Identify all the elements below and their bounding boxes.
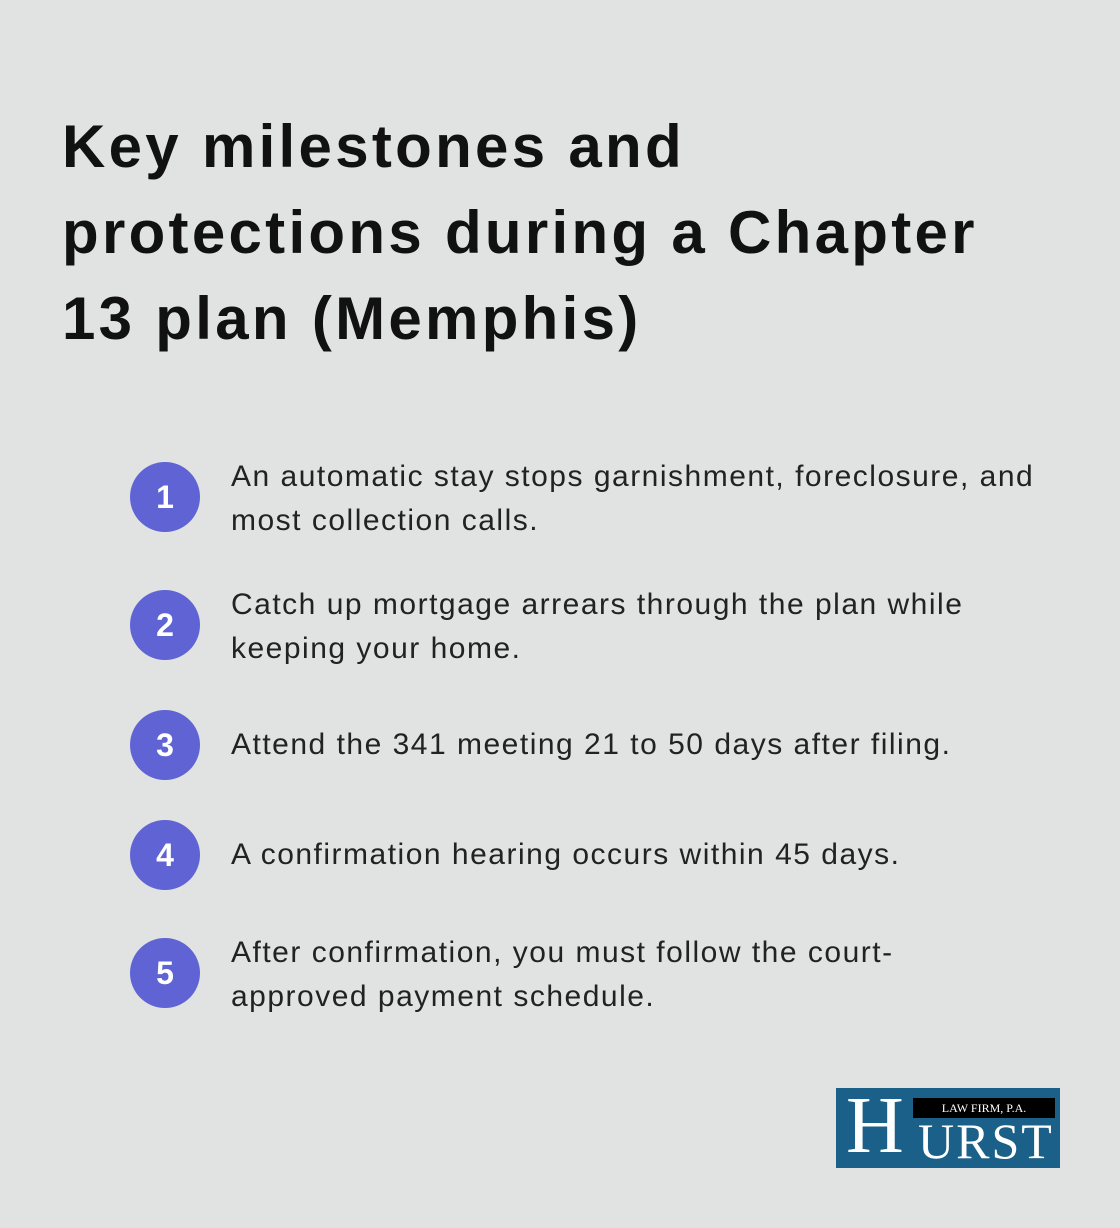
item 4: 4 [156,837,174,873]
item 5: approved payment schedule. [231,980,655,1013]
item 1 [130,460,1034,537]
item 2: Catch up mortgage arrears through the plan while [231,588,963,621]
item 3: Attend the 341 meeting 21 to 50 days after filing. [231,728,951,761]
title: Key milestones and [62,113,685,180]
item 2: keeping your home. [231,632,522,665]
item 3 [130,710,951,780]
title: protections during a Chapter [62,199,978,266]
logo: H [846,1082,904,1170]
item 4: A confirmation hearing occurs within 45 days. [231,838,900,871]
item 4 [130,820,900,890]
logo: LAW FIRM, P.A. [942,1101,1026,1115]
item 5 [130,936,894,1013]
item 3: 3 [156,727,174,763]
logo: URST [918,1113,1054,1169]
title [62,113,978,352]
item 1: most collection calls. [231,504,539,537]
item 5: After confirmation, you must follow the court- [231,936,894,969]
logo [836,1088,1060,1168]
item 1: 1 [156,479,174,515]
item 1: An automatic stay stops garnishment, foreclosure, and [231,460,1034,493]
title: 13 plan (Memphis) [62,285,642,352]
item 2 [130,588,963,665]
item 2: 2 [156,607,174,643]
item 5: 5 [156,955,174,991]
